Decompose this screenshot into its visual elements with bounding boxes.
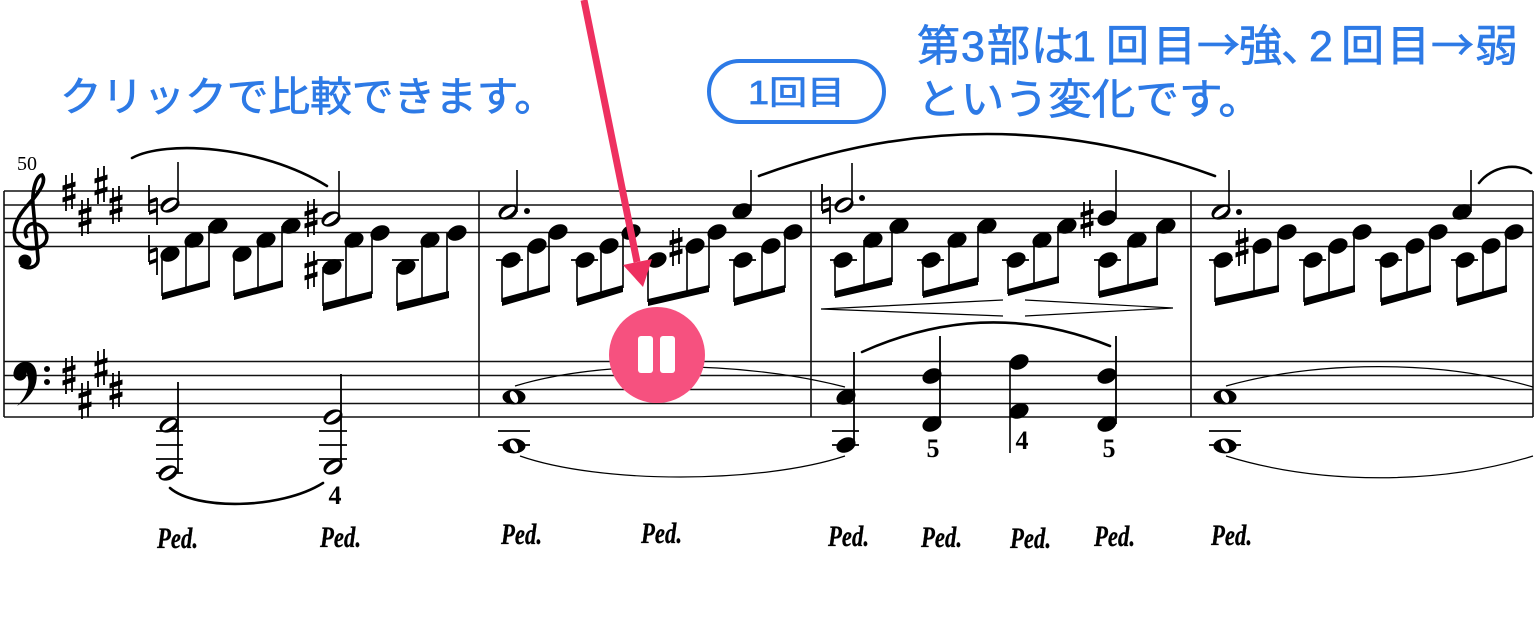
pedal markings: Ped. bbox=[920, 521, 962, 554]
explanation text bbox=[917, 12, 1518, 123]
explanation text: という変化です。 bbox=[917, 76, 1262, 123]
bass clef bbox=[13, 362, 50, 406]
pedal markings bbox=[156, 517, 1252, 555]
explanation text: 弱 bbox=[1475, 23, 1518, 71]
heading: click to compare: クリックで比較できます。 bbox=[60, 74, 556, 120]
treble clef bbox=[14, 175, 47, 268]
pedal markings: Ped. bbox=[827, 520, 869, 553]
measure 3 notes: 5 bbox=[926, 434, 940, 463]
explanation text: 目 bbox=[1387, 23, 1430, 71]
pedal markings: Ped. bbox=[500, 518, 542, 551]
measure 2 notes bbox=[496, 170, 845, 477]
explanation text: 回 bbox=[1106, 23, 1149, 71]
measure 1 notes: 4 bbox=[328, 481, 342, 510]
explanation text: 回 bbox=[1341, 23, 1384, 71]
explanation text: 3 bbox=[961, 23, 985, 71]
pill label: first time bbox=[709, 61, 884, 122]
measure 3 notes: 5 bbox=[1102, 434, 1116, 463]
explanation text: 、 bbox=[1281, 23, 1324, 71]
explanation text: 強 bbox=[1239, 23, 1282, 71]
pill label: first time: 1回目 bbox=[748, 74, 845, 111]
explanation text: 部 bbox=[987, 23, 1030, 71]
explanation text: 1 bbox=[1072, 23, 1096, 71]
measure number: 50 bbox=[17, 153, 37, 175]
measure 3 notes: 4 bbox=[1016, 426, 1028, 455]
pedal markings: Ped. bbox=[319, 521, 361, 554]
pause button bbox=[609, 307, 705, 403]
pedal markings: Ped. bbox=[640, 517, 682, 550]
pedal markings: Ped. bbox=[156, 522, 198, 555]
arrow pointing at pause button bbox=[584, 0, 652, 287]
explanation text: 2 bbox=[1309, 23, 1333, 71]
explanation text: は bbox=[1031, 23, 1074, 71]
pedal markings: Ped. bbox=[1093, 520, 1135, 553]
explanation text: → bbox=[1197, 12, 1240, 74]
pedal markings: Ped. bbox=[1210, 519, 1252, 552]
grand staff lines and barlines bbox=[4, 191, 1533, 417]
measure 1 notes bbox=[132, 148, 469, 510]
measure 3 notes bbox=[759, 134, 1215, 463]
explanation text: → bbox=[1431, 12, 1474, 74]
explanation text: 目 bbox=[1153, 23, 1196, 71]
key signature bbox=[62, 166, 122, 419]
measure 4 notes bbox=[1209, 167, 1533, 478]
explanation text: 第 bbox=[917, 23, 960, 71]
pedal markings: Ped. bbox=[1009, 522, 1051, 555]
